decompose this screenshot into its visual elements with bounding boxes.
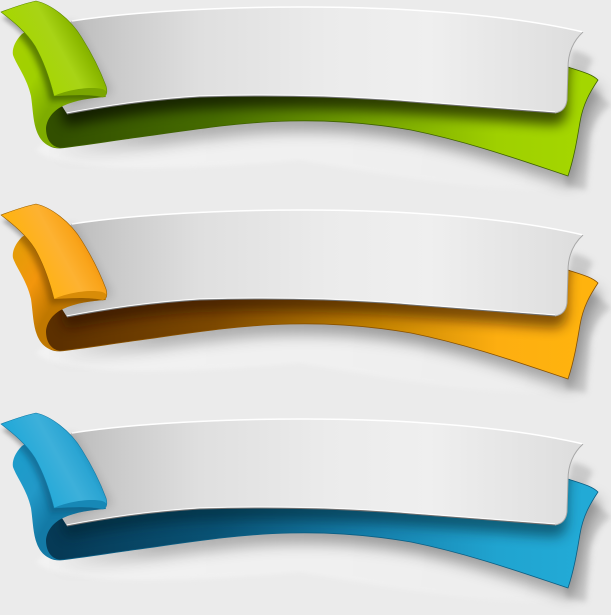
- ribbon tail: [46, 66, 598, 176]
- banner: blue ribbon: [0, 413, 611, 602]
- curled flap: [1, 204, 107, 300]
- white banner panel: [60, 210, 583, 317]
- flap shadow on banner: [50, 224, 112, 307]
- ribbon tail: [46, 270, 598, 380]
- soft ground shadow: [2, 426, 611, 602]
- flap shadow on banner: [50, 21, 112, 104]
- curled flap: [1, 413, 107, 509]
- ribbon fold: [12, 32, 106, 148]
- banner: green ribbon: [0, 1, 611, 190]
- banner: orange ribbon: [0, 204, 611, 393]
- white banner panel: [60, 419, 583, 526]
- white banner panel: [60, 7, 583, 114]
- soft ground shadow: [2, 217, 611, 393]
- soft ground shadow: [2, 14, 611, 190]
- curled flap: [1, 1, 107, 97]
- flap shadow on banner: [50, 433, 112, 516]
- ribbon tail: [46, 478, 598, 588]
- ribbon fold: [12, 236, 106, 351]
- ribbon fold: [12, 444, 106, 560]
